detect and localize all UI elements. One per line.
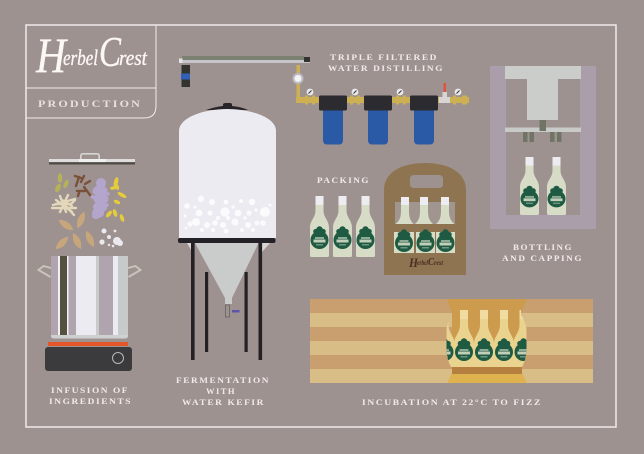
crossbar	[505, 128, 581, 132]
lavender	[91, 178, 110, 219]
label: bottling: AND CAPPING	[502, 254, 583, 263]
label: infusion: INGREDIENTS	[49, 397, 132, 406]
logo panel	[26, 25, 156, 118]
brand name	[35, 27, 148, 83]
label: fermentation: WITH	[206, 387, 236, 396]
brand name: C	[99, 30, 122, 76]
filter 1	[319, 96, 347, 144]
carrier bottles	[396, 197, 454, 224]
cone	[195, 243, 258, 304]
rice	[52, 195, 76, 215]
loose bottles	[310, 196, 375, 257]
brass pipes	[296, 65, 469, 104]
bottle carrier	[384, 163, 466, 275]
label: water filter	[328, 53, 444, 73]
label: bottling	[502, 243, 583, 263]
bubbles	[183, 196, 271, 233]
yellow seeds	[105, 177, 127, 222]
brand name: H	[35, 27, 68, 83]
shelf shadow	[447, 299, 527, 367]
hot plate	[45, 342, 132, 371]
drain valve	[226, 305, 240, 317]
label: packing: PACKING	[317, 176, 370, 185]
label: water filter: TRIPLE FILTERED	[330, 53, 438, 62]
carrier logo: C	[428, 256, 435, 268]
tank cap	[206, 103, 248, 110]
fermentation tank	[178, 103, 276, 360]
stripes	[310, 299, 593, 383]
filter 3	[410, 96, 438, 144]
rim	[178, 238, 276, 243]
carrier label panels	[394, 229, 455, 253]
ingredients	[52, 173, 127, 252]
label: water filter: WATER DISTILLING	[328, 64, 444, 73]
label: incubation: INCUBATION AT 22°C TO FIZZ	[362, 398, 542, 407]
shut-off valve	[181, 65, 190, 87]
inner legs	[205, 272, 208, 352]
pot lid	[49, 154, 135, 164]
flow gauge	[292, 73, 304, 84]
top pipe	[179, 56, 310, 63]
filling bottles	[520, 157, 566, 215]
incubation chamber	[310, 299, 593, 383]
green leaves	[54, 173, 70, 193]
hopper	[505, 66, 581, 120]
label: fermentation	[176, 376, 270, 407]
machine frame	[490, 66, 596, 229]
label: bottling: BOTTLING	[513, 243, 573, 252]
filter 2	[364, 96, 392, 144]
white crystals	[99, 228, 123, 247]
nozzles	[523, 132, 562, 142]
outer legs	[191, 243, 195, 360]
carrier logo: H	[408, 255, 419, 270]
stock pot	[38, 256, 140, 338]
label: infusion	[49, 386, 132, 406]
label: fermentation: FERMENTATION	[176, 376, 270, 385]
red tap	[444, 83, 446, 92]
label: fermentation: WATER KEFIR	[182, 398, 265, 407]
brown sticks	[75, 176, 90, 196]
carrier logo: erbel	[417, 258, 429, 267]
water filter assembly	[292, 65, 469, 144]
carrier logo	[408, 255, 444, 270]
bottling machine	[490, 66, 596, 229]
gauge needles	[308, 90, 460, 94]
plunger	[540, 120, 546, 131]
section heading: PRODUCTION	[38, 100, 142, 110]
brand name: rest	[119, 45, 148, 70]
label: infusion: INFUSION OF	[51, 386, 129, 395]
amber bottles	[446, 310, 526, 367]
tan leaves	[53, 210, 97, 252]
brand name: erbel	[63, 45, 98, 70]
small gauges	[307, 89, 461, 95]
tank body	[179, 109, 276, 238]
shelf base	[447, 373, 527, 383]
carrier logo: rest	[434, 258, 444, 267]
